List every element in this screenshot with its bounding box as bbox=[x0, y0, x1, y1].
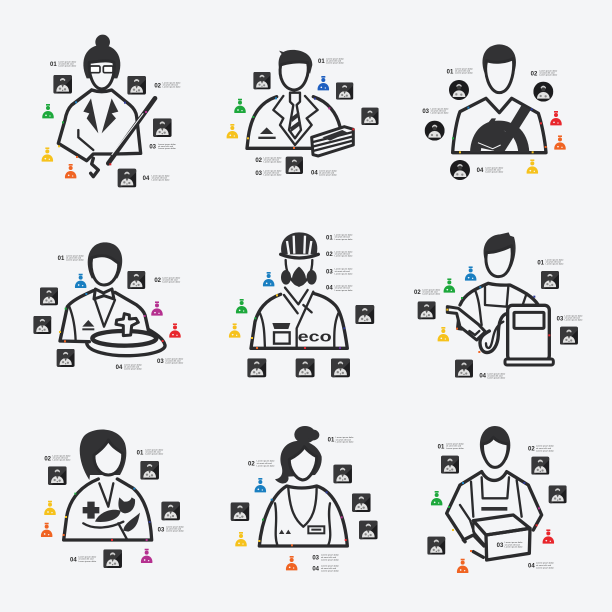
icon: tile 2 bbox=[247, 358, 266, 377]
banker figure bbox=[247, 50, 353, 156]
icon: green worker bbox=[444, 278, 455, 293]
icon: circle tile 1 bbox=[449, 80, 469, 100]
icon: tile 3 bbox=[296, 358, 315, 377]
caption 01: Lorem ipsum dolor bbox=[455, 71, 473, 74]
panel: hostess bbox=[231, 426, 378, 572]
caption 02 bbox=[414, 289, 440, 296]
caption 01 bbox=[438, 442, 464, 450]
caption 01: Lorem ipsum dolor bbox=[336, 441, 354, 444]
icon: tile 2 bbox=[531, 457, 549, 475]
icon: tile 1 bbox=[127, 271, 145, 289]
caption 02 bbox=[255, 156, 282, 164]
icon: purple worker bbox=[151, 301, 163, 316]
croupier figure bbox=[60, 242, 165, 356]
caption 04: Lorem ipsum dolor bbox=[319, 173, 337, 176]
caption 01: 01 bbox=[58, 256, 65, 262]
icon: blue worker bbox=[318, 76, 329, 90]
caption 02: Lorem ipsum dolor bbox=[264, 156, 282, 159]
veterinarian figure bbox=[64, 430, 152, 540]
caption 02: 02 bbox=[248, 462, 255, 468]
caption 03: Lorem ipsum dolor bbox=[158, 147, 176, 150]
icon: circle tile 2 bbox=[533, 82, 553, 102]
caption 04: sit amet elit sed bbox=[152, 176, 167, 179]
icon: tile 3 bbox=[153, 118, 172, 137]
panel: teacher bbox=[42, 35, 181, 187]
caption 03: Lorem ipsum dolor bbox=[565, 315, 583, 318]
icon: red worker bbox=[550, 111, 562, 125]
caption 02 bbox=[326, 250, 353, 258]
caption 02: Lorem ipsum dolor bbox=[163, 81, 181, 84]
caption 03: 03 bbox=[157, 359, 164, 365]
caption 02: sit amet elit sed bbox=[335, 252, 350, 255]
caption 02: Lorem ipsum dolor bbox=[264, 160, 282, 163]
caption 04: sit amet elit sed bbox=[78, 558, 94, 561]
caption 03: Lorem ipsum dolor bbox=[264, 173, 282, 176]
caption 03 bbox=[157, 357, 183, 365]
caption 03: Lorem ipsum dolor bbox=[166, 525, 184, 528]
caption 02: Lorem ipsum dolor bbox=[257, 464, 275, 467]
caption 03: 03 bbox=[255, 171, 263, 177]
icon: tile 4 bbox=[118, 169, 136, 187]
caption 04: 04 bbox=[116, 365, 123, 371]
colour dots bbox=[63, 488, 151, 541]
caption 03: sit amet elit sed bbox=[505, 543, 520, 546]
panel: delivery worker bbox=[427, 426, 567, 573]
caption 01: Lorem ipsum dolor bbox=[336, 436, 354, 439]
caption 03 bbox=[422, 107, 449, 115]
panel: veterinarian bbox=[41, 430, 184, 568]
caption 04: 04 bbox=[311, 171, 318, 177]
icon: tile 1 bbox=[53, 75, 72, 94]
caption 02: Lorem ipsum dolor bbox=[53, 459, 71, 462]
caption 01: sit amet elit sed bbox=[58, 62, 74, 65]
icon: tile 4 bbox=[57, 349, 75, 367]
caption 01: Lorem ipsum dolor bbox=[446, 442, 464, 445]
icon: tile 1 bbox=[333, 465, 352, 483]
caption 03: 03 bbox=[422, 109, 430, 115]
caption 02: Lorem ipsum dolor bbox=[422, 289, 440, 292]
caption 01: 01 bbox=[328, 438, 335, 444]
caption 04: Lorem ipsum dolor bbox=[321, 565, 339, 568]
icon: yellow worker bbox=[227, 124, 238, 138]
icon: tile 2 bbox=[336, 82, 353, 100]
icon: yellow worker bbox=[44, 501, 56, 515]
caption 01: Lorem ipsum dolor bbox=[58, 61, 76, 64]
icon: blue worker bbox=[75, 274, 86, 288]
caption 01 bbox=[58, 254, 84, 262]
caption 04 bbox=[479, 372, 505, 380]
caption 03: sit amet elit sed bbox=[166, 527, 182, 530]
caption 04: 04 bbox=[70, 558, 77, 564]
caption 02: Lorem ipsum dolor bbox=[536, 449, 554, 452]
caption 01 bbox=[328, 436, 354, 444]
caption 04: sit amet elit sed bbox=[321, 567, 337, 570]
icon: tile 1 bbox=[48, 466, 67, 485]
caption 02 bbox=[528, 445, 554, 452]
icon: orange worker bbox=[554, 135, 566, 150]
icon: tile 3 bbox=[560, 327, 578, 345]
caption 03: 03 bbox=[557, 316, 564, 322]
colour dots bbox=[58, 101, 147, 165]
caption 03: Lorem ipsum dolor bbox=[565, 319, 583, 322]
caption 01 bbox=[326, 234, 353, 241]
caption 03 bbox=[497, 541, 523, 549]
caption 01: Lorem ipsum dolor bbox=[546, 258, 564, 261]
caption 02: sit amet elit sed bbox=[257, 462, 272, 465]
caption 01: Lorem ipsum dolor bbox=[145, 448, 163, 451]
panel: fuel attendant bbox=[414, 232, 583, 380]
caption 04: Lorem ipsum dolor bbox=[321, 569, 339, 572]
caption 01: Lorem ipsum dolor bbox=[546, 262, 564, 265]
caption 04: 04 bbox=[326, 286, 333, 292]
caption 02: 02 bbox=[531, 71, 538, 77]
caption 01 bbox=[447, 67, 473, 75]
icon: orange worker bbox=[457, 559, 468, 573]
caption 03: Lorem ipsum dolor bbox=[431, 107, 449, 110]
caption 03: Lorem ipsum dolor bbox=[321, 558, 339, 561]
teacher figure bbox=[58, 35, 155, 177]
icon: tile 1 bbox=[441, 456, 459, 474]
icon: tile 2 bbox=[127, 76, 146, 95]
caption 02: 02 bbox=[44, 456, 52, 462]
icon: tile 1 bbox=[355, 305, 374, 324]
caption 02: 02 bbox=[528, 446, 535, 452]
icon: tile 3 bbox=[161, 502, 180, 520]
caption 03 bbox=[557, 315, 583, 322]
icon: blue worker bbox=[255, 478, 266, 492]
caption 02: sit amet elit sed bbox=[162, 278, 178, 281]
caption 01: sit amet elit sed bbox=[446, 445, 462, 448]
caption 03: 03 bbox=[158, 527, 165, 533]
caption 04: 04 bbox=[479, 374, 487, 380]
caption 04: Lorem ipsum dolor bbox=[536, 566, 554, 569]
icon: green worker bbox=[431, 491, 442, 505]
caption 01 bbox=[537, 258, 564, 266]
caption 03: sit amet elit sed bbox=[335, 270, 350, 273]
caption 04: Lorem ipsum dolor bbox=[124, 363, 142, 366]
icon: green worker bbox=[42, 104, 54, 118]
caption 02: Lorem ipsum dolor bbox=[162, 280, 180, 283]
icon: yellow worker bbox=[42, 147, 53, 162]
caption 04: Lorem ipsum dolor bbox=[124, 367, 142, 370]
caption 04: sit amet elit sed bbox=[124, 365, 140, 368]
icon: orange worker bbox=[41, 523, 52, 537]
icon: magenta worker bbox=[141, 549, 152, 563]
caption 03: Lorem ipsum dolor bbox=[158, 143, 176, 146]
caption 02 bbox=[44, 454, 71, 462]
caption 01: Lorem ipsum dolor bbox=[335, 238, 353, 241]
icon: green worker bbox=[236, 299, 247, 313]
icon: blue worker bbox=[465, 266, 476, 281]
caption 04: Lorem ipsum dolor bbox=[485, 166, 503, 169]
caption 02 bbox=[531, 70, 557, 77]
caption 04: sit amet elit sed bbox=[536, 564, 552, 567]
caption 01: Lorem ipsum dolor bbox=[446, 447, 464, 450]
caption 04 bbox=[143, 174, 170, 182]
caption 02: 02 bbox=[154, 83, 162, 89]
colour dots bbox=[446, 286, 550, 353]
caption 02 bbox=[154, 276, 180, 284]
colour dots bbox=[448, 482, 540, 552]
caption 03: Lorem ipsum dolor bbox=[335, 268, 353, 271]
icon: blue worker bbox=[263, 272, 274, 286]
caption 04: Lorem ipsum dolor bbox=[78, 556, 96, 559]
caption 02: sit amet elit sed bbox=[264, 158, 279, 161]
delivery worker figure bbox=[447, 426, 542, 560]
caption 03 bbox=[312, 554, 339, 561]
colour dots bbox=[452, 107, 547, 153]
caption 01: Lorem ipsum dolor bbox=[58, 64, 76, 67]
caption 02: 02 bbox=[154, 278, 162, 284]
caption 03: sit amet elit sed bbox=[431, 109, 446, 112]
icon: tile 4 bbox=[286, 157, 303, 174]
caption 04 bbox=[70, 556, 96, 564]
icon: yellow worker bbox=[438, 327, 449, 341]
colour dots bbox=[251, 294, 345, 349]
caption 03: Lorem ipsum dolor bbox=[165, 357, 183, 360]
caption 03: sit amet elit sed bbox=[565, 317, 580, 320]
caption 02: Lorem ipsum dolor bbox=[53, 454, 71, 457]
caption 03: Lorem ipsum dolor bbox=[505, 541, 523, 544]
caption 02 bbox=[248, 460, 275, 468]
caption 01: sit amet elit sed bbox=[66, 256, 82, 259]
caption 04: sit amet elit sed bbox=[487, 374, 503, 377]
icon: tile 4 bbox=[331, 358, 350, 377]
caption 02: Lorem ipsum dolor bbox=[536, 445, 554, 448]
icon: tile 4 bbox=[427, 537, 445, 555]
caption 01: 01 bbox=[447, 69, 454, 75]
caption 02: sit amet elit sed bbox=[422, 291, 438, 294]
caption 03: Lorem ipsum dolor bbox=[505, 546, 523, 549]
caption 04: sit amet elit sed bbox=[335, 287, 350, 290]
caption 03: sit amet elit sed bbox=[321, 556, 337, 559]
caption 02: 02 bbox=[414, 290, 421, 296]
caption 04: Lorem ipsum dolor bbox=[536, 562, 554, 565]
caption 03: sit amet elit sed bbox=[165, 359, 181, 362]
caption 03 bbox=[326, 268, 353, 276]
caption 04 bbox=[528, 562, 554, 569]
caption 03: Lorem ipsum dolor bbox=[166, 530, 184, 533]
panel: eco worker bbox=[229, 232, 374, 377]
icon: red worker bbox=[543, 529, 554, 544]
caption 03: Lorem ipsum dolor bbox=[165, 361, 183, 364]
icon: yellow worker bbox=[527, 159, 538, 174]
caption 04: Lorem ipsum dolor bbox=[335, 284, 353, 287]
caption 02: Lorem ipsum dolor bbox=[162, 276, 180, 279]
icon: tile 4 bbox=[455, 360, 473, 378]
caption 04: Lorem ipsum dolor bbox=[319, 169, 337, 172]
caption 04: 04 bbox=[477, 168, 484, 174]
caption 01: sit amet elit sed bbox=[145, 450, 161, 453]
caption 01: sit amet elit sed bbox=[335, 236, 350, 239]
caption 03 bbox=[158, 525, 184, 533]
icon: tile 2 bbox=[140, 461, 159, 480]
icon: tile 3 bbox=[549, 485, 567, 503]
caption 02: sit amet elit sed bbox=[53, 456, 68, 459]
icon: yellow worker bbox=[229, 323, 240, 338]
panel: croupier bbox=[33, 242, 183, 371]
caption 01: Lorem ipsum dolor bbox=[66, 254, 84, 257]
caption 01: Lorem ipsum dolor bbox=[326, 58, 344, 61]
caption 04: 04 bbox=[312, 566, 320, 572]
caption 04: Lorem ipsum dolor bbox=[485, 170, 503, 173]
caption 02: Lorem ipsum dolor bbox=[335, 250, 353, 253]
caption 04: Lorem ipsum dolor bbox=[78, 560, 96, 563]
caption 01: sit amet elit sed bbox=[326, 60, 342, 63]
eco worker figure bbox=[251, 232, 347, 348]
caption 03: 03 bbox=[149, 144, 157, 150]
text: eco: eco bbox=[298, 330, 332, 346]
icon: circle tile 4 bbox=[450, 160, 470, 180]
panel: banker bbox=[227, 50, 379, 177]
caption 01 bbox=[137, 448, 163, 456]
caption 04: Lorem ipsum dolor bbox=[152, 178, 170, 181]
caption 02: Lorem ipsum dolor bbox=[422, 293, 440, 296]
caption 02: sit amet elit sed bbox=[536, 447, 552, 450]
caption 04: Lorem ipsum dolor bbox=[152, 174, 170, 177]
caption 03: 03 bbox=[497, 543, 504, 549]
caption 02: Lorem ipsum dolor bbox=[257, 460, 275, 463]
caption 04 bbox=[116, 363, 142, 371]
icon: tile 2 bbox=[40, 287, 58, 305]
caption 02: 02 bbox=[255, 158, 263, 164]
caption 02: 02 bbox=[326, 252, 333, 258]
caption 03: 03 bbox=[326, 270, 333, 276]
caption 04 bbox=[326, 284, 353, 292]
caption 04: sit amet elit sed bbox=[485, 168, 501, 171]
caption 04: Lorem ipsum dolor bbox=[335, 289, 353, 292]
caption 04 bbox=[311, 169, 337, 177]
icon: yellow worker bbox=[235, 532, 247, 546]
caption 04 bbox=[312, 565, 339, 572]
icon: tile 2 bbox=[352, 493, 371, 512]
caption 01: 01 bbox=[50, 62, 57, 68]
caption 01: Lorem ipsum dolor bbox=[145, 453, 163, 456]
caption 01: Lorem ipsum dolor bbox=[66, 258, 84, 261]
icon: tile 3 bbox=[359, 521, 378, 539]
panel: driver bbox=[422, 44, 566, 180]
caption 01: 01 bbox=[318, 59, 325, 65]
caption 03: 03 bbox=[312, 555, 320, 561]
colour dots bbox=[59, 293, 164, 342]
caption 03: Lorem ipsum dolor bbox=[321, 554, 339, 557]
caption 04: 04 bbox=[528, 563, 535, 569]
caption 01: 01 bbox=[326, 235, 333, 241]
caption 03: Lorem ipsum dolor bbox=[264, 169, 282, 172]
icon: tile 1 bbox=[541, 271, 559, 289]
caption 01: Lorem ipsum dolor bbox=[326, 62, 344, 65]
caption 02: Lorem ipsum dolor bbox=[163, 85, 181, 88]
caption 04 bbox=[477, 166, 503, 174]
caption 02: Lorem ipsum dolor bbox=[539, 74, 557, 77]
caption 01: sit amet elit sed bbox=[546, 260, 561, 263]
caption 04: 04 bbox=[143, 176, 150, 182]
icon: orange worker bbox=[286, 556, 297, 570]
caption 03: Lorem ipsum dolor bbox=[335, 272, 353, 275]
caption 02 bbox=[154, 81, 181, 89]
icon: tile 4 bbox=[231, 502, 249, 521]
icon: green worker bbox=[234, 99, 246, 113]
icon: circle tile 3 bbox=[425, 121, 445, 141]
caption 02: sit amet elit sed bbox=[163, 83, 178, 86]
driver figure bbox=[453, 44, 546, 153]
icon: tile 3 bbox=[33, 316, 51, 334]
fuel attendant figure bbox=[447, 232, 553, 365]
hostess figure bbox=[259, 426, 347, 546]
caption 04: Lorem ipsum dolor bbox=[487, 376, 505, 379]
caption 01: 01 bbox=[137, 450, 144, 456]
caption 02: Lorem ipsum dolor bbox=[539, 70, 557, 73]
caption 01: sit amet elit sed bbox=[455, 69, 471, 72]
caption 01: Lorem ipsum dolor bbox=[335, 234, 353, 237]
caption 03: sit amet elit sed bbox=[264, 171, 279, 174]
icon: tile 1 bbox=[253, 72, 271, 89]
caption 04: sit amet elit sed bbox=[319, 171, 335, 174]
caption 01: sit amet elit sed bbox=[336, 438, 351, 441]
caption 01 bbox=[50, 61, 76, 68]
icon: tile 4 bbox=[103, 549, 122, 568]
caption 02: sit amet elit sed bbox=[539, 72, 555, 75]
caption 03: Lorem ipsum dolor bbox=[431, 111, 449, 114]
icon: orange worker bbox=[65, 164, 76, 178]
caption 01: 01 bbox=[438, 444, 445, 450]
caption 03 bbox=[255, 169, 282, 177]
caption 03: sit amet elit sed bbox=[158, 145, 174, 148]
caption 02: Lorem ipsum dolor bbox=[335, 255, 353, 258]
caption 04: Lorem ipsum dolor bbox=[487, 372, 505, 375]
colour dots bbox=[247, 97, 354, 149]
caption 01: Lorem ipsum dolor bbox=[455, 67, 473, 70]
colour dots bbox=[258, 491, 347, 546]
caption 01 bbox=[318, 58, 344, 65]
caption 03 bbox=[149, 143, 176, 150]
icon: tile 2 bbox=[418, 301, 436, 319]
caption 01: 01 bbox=[537, 260, 545, 266]
icon: red worker bbox=[169, 323, 181, 338]
icon: tile 3 bbox=[361, 108, 379, 125]
